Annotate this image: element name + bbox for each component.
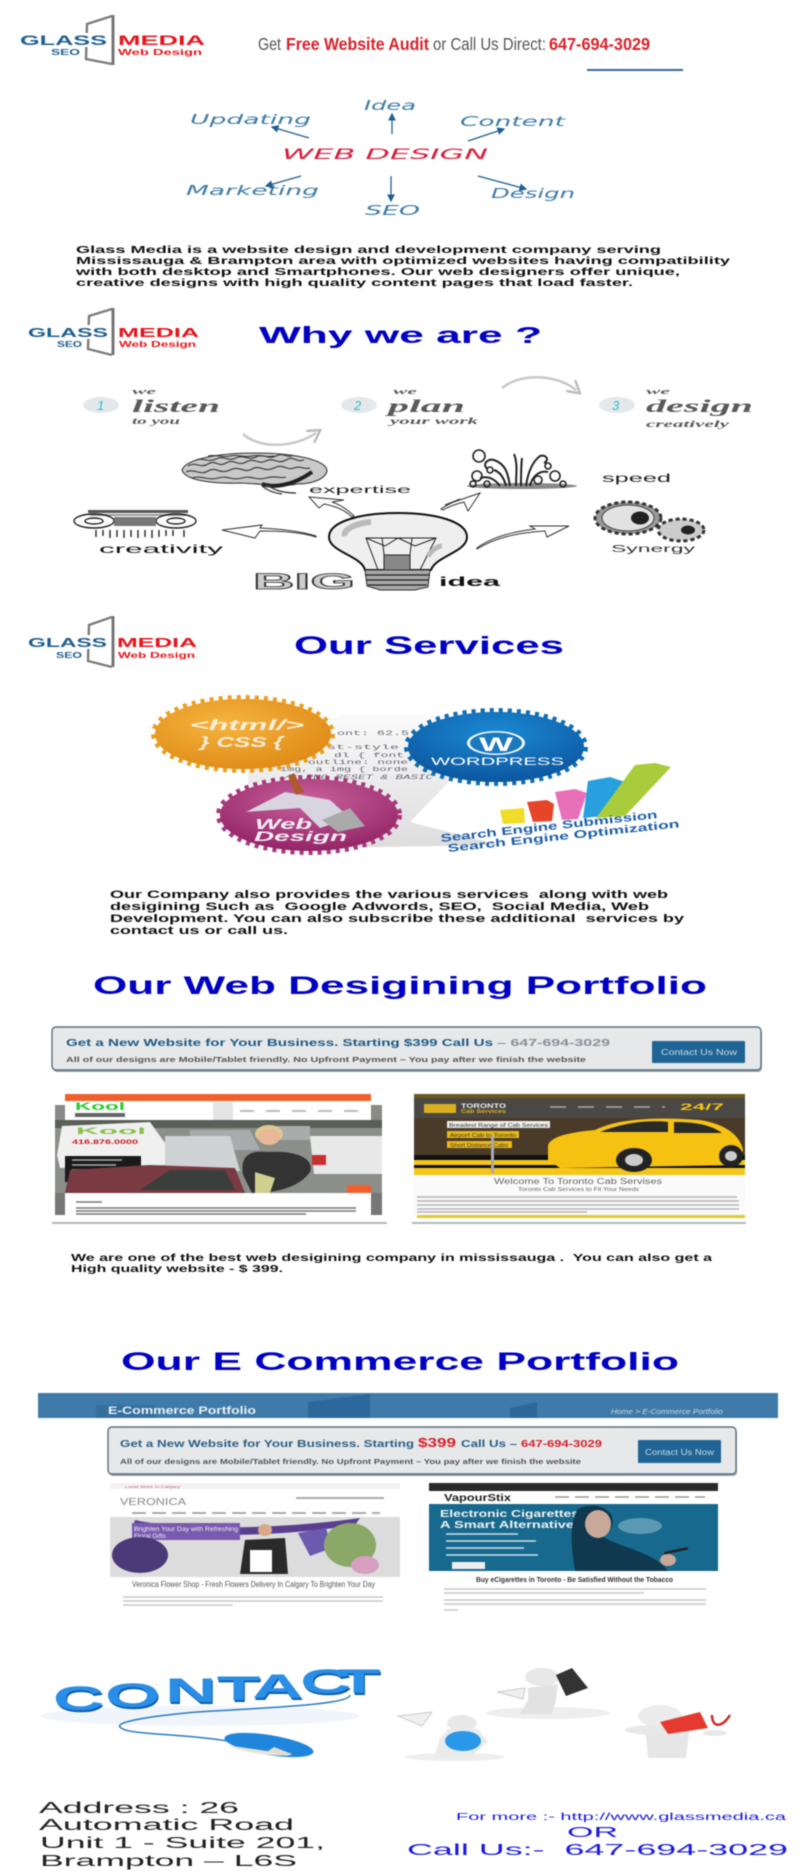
screenshot: vapourstix: A Smart Alternative [440, 1519, 574, 1531]
address block: Address : 26 [39, 1800, 239, 1817]
icon: ionic column [74, 510, 196, 538]
contact reflection [40, 1706, 360, 1726]
e-commerce title strip: Home > E-Commerce Portfolio [611, 1409, 723, 1416]
badge: wordpress: WORDPRESS [431, 756, 564, 768]
logo: services section [28, 616, 198, 667]
code paper [248, 715, 500, 848]
code paper: /* PNG RESET & BASIC [283, 774, 433, 781]
e-commerce title strip: E-Commerce Portfolio [108, 1405, 256, 1417]
step 3 design: we [646, 387, 671, 396]
banner: e-commerce offer: Contact Us Now [645, 1448, 714, 1457]
banner: e-commerce offer: All of our designs are Mobile/Tablet friendly. No Upfront Payment – You pay after we finish the website [120, 1459, 581, 1466]
screenshot: toronto cab: Breadest Range of Cab Services [449, 1123, 548, 1129]
arrows from bulb [222, 493, 569, 549]
web design word diagram [186, 99, 575, 219]
banner: e-commerce offer [108, 1427, 737, 1476]
logo: header Glass Media: GLASS [20, 32, 107, 48]
step 1 listen [83, 387, 220, 426]
banner: new website offer [52, 1027, 762, 1072]
contact graphic [40, 1662, 382, 1762]
logo: header Glass Media: SEO [51, 48, 80, 57]
figure: person with mail [398, 1712, 505, 1761]
code paper: st-style [327, 744, 399, 751]
arrow: listen to plan [243, 433, 316, 445]
services collage [155, 699, 680, 855]
header call to action: Free Website Audit [286, 34, 429, 54]
icon: brain [182, 453, 327, 494]
header call to action: Get [258, 34, 281, 54]
screenshot: veronica flower shop: VERONICA [120, 1497, 186, 1508]
screenshot: toronto cab: Welcome To Toronto Cab Servises [494, 1177, 662, 1186]
intro paragraph: Glass Media is a website design and development company serving [76, 244, 661, 256]
heading: why we are: Why we are ? [259, 322, 542, 348]
screenshot: vapourstix [429, 1483, 718, 1610]
step 3 design: design [646, 396, 753, 416]
banner: new website offer: Get a New Website for Your Business. Starting $399 Call Us [66, 1038, 494, 1049]
step 2 plan: we [393, 387, 418, 396]
header call to action: 647-694-3029 [549, 34, 650, 54]
logo: why section: Web Design [119, 340, 196, 349]
screenshot: veronica flower shop: Local Store in Calgary [125, 1484, 180, 1489]
services paragraph: Our Company also provides the various services along with web [110, 889, 668, 901]
step 3 design: creatively [646, 419, 731, 429]
screenshot: toronto cab: Toronto Cab Services to Fit Your Needs [518, 1187, 639, 1193]
logo: header Glass Media [20, 15, 205, 65]
web design word diagram: Marketing [186, 184, 319, 199]
badge: wordpress [408, 712, 584, 782]
step 1 listen: to you [132, 416, 180, 426]
e-commerce title strip [38, 1393, 778, 1418]
web design word diagram: SEO [365, 204, 420, 219]
screenshot: vapourstix: Electronic Cigarettes [440, 1508, 579, 1520]
label: idea: idea [439, 574, 502, 589]
web design word diagram: Design [491, 187, 575, 202]
heading: our services: Our Services [294, 632, 564, 660]
code paper: outline: none [308, 759, 408, 766]
banner: new website offer: – 647-694-3029 [497, 1038, 611, 1049]
label: expertise: expertise [309, 485, 412, 496]
contact word: CONTACT [53, 1662, 381, 1717]
contact details: OR [567, 1824, 618, 1841]
contact details: For more :- http://www.glassmedia.ca [456, 1812, 787, 1823]
heading: web portfolio: Our Web Desigining Portfolio [93, 972, 707, 1000]
web design word diagram: Content [460, 115, 567, 130]
code paper: dl { font [334, 752, 404, 759]
intro paragraph [74, 244, 730, 289]
logo: header Glass Media: Web Design [118, 48, 202, 57]
figure: person with phone [486, 1668, 610, 1719]
banner: new website offer: Contact Us Now [661, 1048, 737, 1057]
portfolio paragraph: We are one of the best web desigining company in mississauga . You can also get a [71, 1252, 712, 1264]
step 3 design [599, 387, 753, 429]
icon: gears [595, 502, 704, 541]
intro paragraph: Mississauga & Brampton area with optimized websites having compatibility [76, 255, 730, 267]
header call to action: or Call Us Direct: [433, 34, 546, 54]
arrow: plan to design [502, 377, 576, 390]
logo: why section [28, 308, 200, 355]
icon: light bulb [329, 513, 467, 590]
screenshot: veronica flower shop [110, 1483, 400, 1605]
screenshot: driving school [52, 1094, 387, 1224]
banner: e-commerce offer: Get a New Website for Your Business. Starting [120, 1439, 414, 1450]
logo: services section: Web Design [118, 651, 195, 660]
step 2 plan: plan [383, 396, 465, 416]
search engine optimization text: Search Engine Optimization [447, 818, 680, 855]
logo: why section: GLASS [28, 325, 109, 340]
label: speed: speed [602, 471, 671, 485]
step 2 plan [341, 387, 479, 426]
screenshot: toronto cab: 24/7 [680, 1102, 724, 1112]
screenshot: toronto cab: Short Distance Cabs [450, 1143, 508, 1149]
web design word diagram: Updating [190, 113, 311, 128]
banner: e-commerce offer: 647-694-3029 [521, 1439, 603, 1450]
badge: web design: Web [255, 816, 312, 833]
screenshot: driving school: 416.876.0000 [72, 1140, 139, 1146]
services paragraph: Development. You can also subscribe these additional services by [110, 913, 685, 925]
badge: web design [220, 773, 398, 851]
logo: why section: SEO [57, 340, 82, 349]
icon: plant swirls [467, 450, 577, 489]
intro paragraph: creative designs with high quality content pages that load faster. [76, 277, 633, 289]
screenshot: toronto cab: Airport Cab to Toronto [450, 1133, 516, 1139]
contact word: CONTACT [54, 1664, 382, 1719]
contact details: Call Us:- 647-694-3029 [407, 1842, 788, 1859]
figure: person with slingshot [625, 1705, 730, 1758]
logo: header Glass Media: MEDIA [118, 32, 205, 48]
step 1 listen: listen [132, 396, 220, 416]
logo: services section: GLASS [28, 635, 108, 650]
screenshot: driving school: Kool [75, 1101, 125, 1113]
web design word diagram: Idea [364, 99, 416, 114]
services paragraph: desigining Such as Google Adwords, SEO, Social Media, Web [110, 901, 649, 913]
badge: wordpress: W [479, 735, 513, 756]
badge: web design: Design [254, 828, 347, 844]
logo: why section: MEDIA [118, 325, 200, 340]
portfolio paragraph: High quality website - $ 399. [71, 1263, 283, 1275]
screenshot: vapourstix: VapourStix [444, 1493, 512, 1504]
banner: new website offer: All of our designs are Mobile/Tablet friendly. No Upfront Payment – You pay after we finish the website [66, 1057, 586, 1064]
contact details [407, 1812, 788, 1859]
portfolio paragraph [71, 1252, 712, 1275]
screenshot: toronto cab: TORONTO [461, 1104, 507, 1110]
step 1 listen: 1 [97, 398, 104, 413]
screenshot: vapourstix: Buy eCigarettes in Toronto - Be Satisfied Without the Tobacco [476, 1575, 673, 1584]
heading: e-commerce portfolio: Our E Commerce Portfolio [121, 1348, 679, 1376]
address block: Unit 1 - Suite 201, [40, 1835, 325, 1852]
screenshot: driving school: Kool [76, 1126, 146, 1136]
address block [39, 1800, 325, 1870]
search engine text: Search Engine Submission [440, 809, 658, 845]
screenshot: toronto cab [412, 1094, 746, 1224]
badge: html css: } CSS { [197, 734, 285, 751]
3D bar chart [500, 763, 671, 824]
screenshot: veronica flower shop: Brighten Your Day with Refreshing [134, 1527, 238, 1533]
header call to action [258, 34, 650, 54]
intro paragraph: with both desktop and Smartphones. Our web designers offer unique, [74, 266, 680, 278]
step 1 listen: we [132, 387, 157, 396]
label: big: BIG [253, 569, 355, 594]
badge: html css [155, 699, 331, 769]
address block: Automatic Road [39, 1817, 294, 1834]
label: synergy: Synergy [611, 544, 695, 555]
banner: e-commerce offer: Call Us – [461, 1439, 518, 1450]
badge: html css: <html/> [190, 717, 304, 734]
step 3 design: 3 [612, 398, 620, 413]
mouse [223, 1728, 315, 1762]
services paragraph [110, 889, 685, 937]
logo: services section: SEO [56, 651, 82, 660]
address block: Brampton – L6S [40, 1853, 297, 1870]
code paper: ont: 62.5 [337, 730, 409, 737]
logo: services section: MEDIA [117, 635, 198, 650]
step 2 plan: your work [388, 416, 479, 426]
mouse cable [120, 1695, 350, 1741]
banner: e-commerce offer: $399 [418, 1435, 456, 1450]
screenshot: toronto cab: Cab Services [461, 1109, 506, 1115]
services paragraph: contact us or call us. [110, 925, 288, 937]
screenshot: veronica flower shop: Floral Gifts [134, 1534, 166, 1540]
web design word diagram: WEB DESIGN [282, 147, 489, 163]
screenshot: veronica flower shop: Veronica Flower Shop - Fresh Flowers Delivery In Calgary To Brighten Your Day [132, 1580, 375, 1589]
code paper: img, a img { borde [280, 766, 408, 773]
step 2 plan: 2 [353, 398, 362, 413]
label: creativity: creativity [99, 542, 223, 556]
